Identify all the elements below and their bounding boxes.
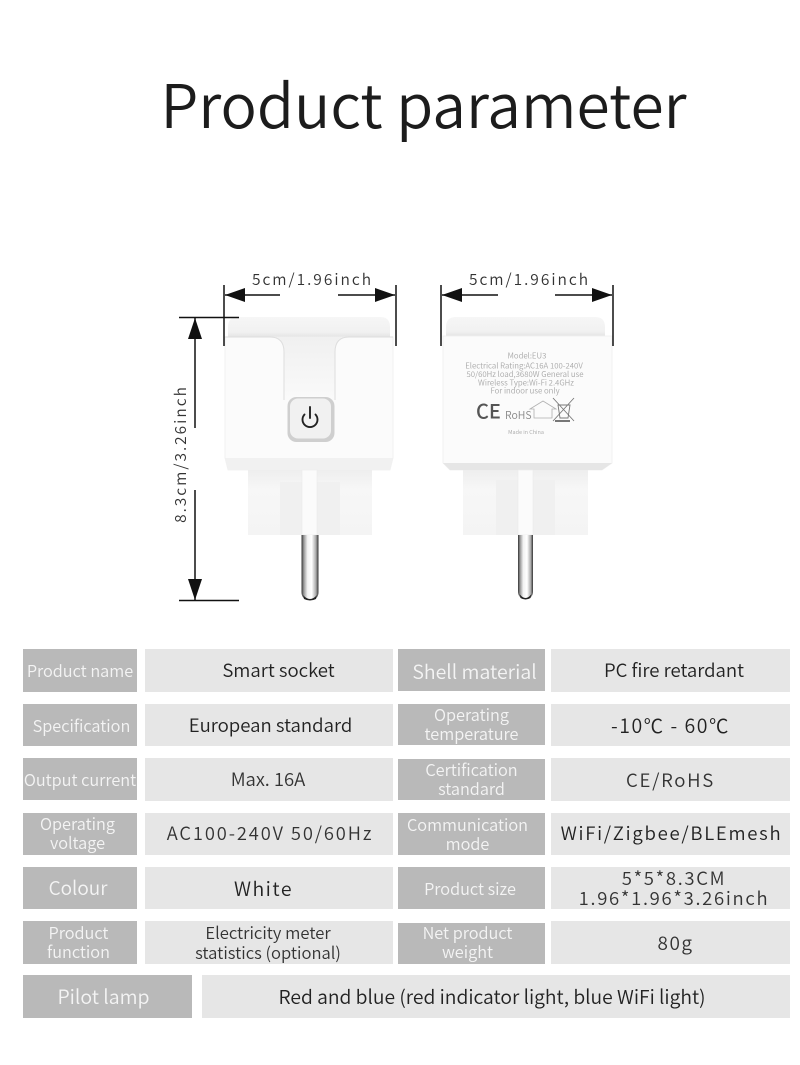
value: certification standard xyxy=(551,758,790,801)
label: certification standard: standard xyxy=(438,776,505,800)
value: shell material xyxy=(551,649,790,692)
value: product size: 1.96*1.96*3.26inch xyxy=(579,885,769,911)
label: colour xyxy=(23,867,137,909)
label: product name: Product name xyxy=(27,658,133,682)
value: product function: Electricity meter xyxy=(205,920,331,944)
rear label text: Model:EU3 xyxy=(508,350,546,362)
rear label text: Wireless Type:Wi-Fi 2.4GHz xyxy=(478,378,574,388)
label: net product weight: weight xyxy=(442,938,493,962)
label: certification standard xyxy=(398,759,545,800)
label: product function: function xyxy=(47,938,110,962)
rear plug xyxy=(443,317,612,600)
value: specification xyxy=(145,704,393,746)
certification marks: CE xyxy=(476,396,501,424)
width dimension: rear: 5cm/1.96inch xyxy=(469,268,590,290)
rear label text xyxy=(465,350,584,436)
label: pilot lamp xyxy=(23,975,192,1018)
value: product size xyxy=(551,867,790,909)
value: product name: Smart socket xyxy=(222,656,335,683)
label: operating voltage: voltage xyxy=(50,830,105,854)
value: shell material: PC fire retardant xyxy=(604,656,744,683)
product diagram xyxy=(169,268,614,602)
rear label text: Made in China xyxy=(508,428,544,436)
width dimension: front xyxy=(224,268,396,346)
width dimension: front: 5cm/1.96inch xyxy=(252,268,373,290)
label: communication mode: mode xyxy=(446,830,489,854)
label: pilot lamp: Pilot lamp xyxy=(57,981,150,1010)
value: colour xyxy=(145,867,393,909)
certification marks: RoHS xyxy=(505,408,532,423)
label: net product weight xyxy=(398,923,545,964)
label: net product weight: Net product xyxy=(423,920,512,944)
value: product function: statistics (optional) xyxy=(195,940,341,964)
label: operating voltage: Operating xyxy=(40,810,115,834)
label: shell material xyxy=(398,649,545,691)
label: operating temperature: Operating xyxy=(434,702,509,726)
label: product function xyxy=(23,921,137,964)
rear label text: 50/60Hz load,3680W General use xyxy=(466,369,584,380)
value: operating temperature xyxy=(551,704,790,746)
label: communication mode: Communication xyxy=(407,812,528,836)
label: operating voltage xyxy=(23,813,137,855)
value: product function xyxy=(145,921,393,964)
width dimension: rear xyxy=(441,268,613,346)
title: Product parameter xyxy=(160,59,686,146)
value: net product weight: 80g xyxy=(658,928,693,956)
label: specification xyxy=(23,704,137,746)
value: communication mode: WiFi/Zigbee/BLEmesh xyxy=(561,819,782,846)
front plug xyxy=(225,317,393,600)
label: output current: Output current xyxy=(24,766,136,790)
label: operating temperature xyxy=(398,704,545,745)
label: product size: Product size xyxy=(424,876,516,900)
value: output current xyxy=(145,758,393,801)
value: specification: European standard xyxy=(189,711,352,738)
height dimension: 8.3cm/3.26inch xyxy=(169,385,191,523)
value: operating voltage: AC100-240V 50/60Hz xyxy=(167,820,373,846)
label: colour: Colour xyxy=(49,874,107,900)
label: specification: Specification xyxy=(33,712,130,736)
value: communication mode xyxy=(551,813,790,855)
label: communication mode xyxy=(398,813,545,855)
label: product name xyxy=(23,649,137,692)
value: output current: Max. 16A xyxy=(231,766,305,792)
rear label text: For indoor use only xyxy=(490,386,560,396)
label: product function: Product xyxy=(49,920,108,944)
value: pilot lamp xyxy=(202,975,790,1018)
rear label text: Electrical Rating:AC16A 100-240V xyxy=(465,360,583,372)
label: certification standard: Certification xyxy=(425,756,518,780)
value: operating voltage xyxy=(145,813,393,855)
label: operating temperature: temperature xyxy=(424,720,518,744)
certification marks xyxy=(476,396,574,424)
label: product size xyxy=(398,867,545,909)
icon: power button xyxy=(288,397,334,442)
value: product name xyxy=(145,649,393,692)
value: product size: 5*5*8.3CM xyxy=(622,865,726,891)
value: pilot lamp: Red and blue (red indicator light, blue WiFi light) xyxy=(278,982,706,1010)
height dimension xyxy=(169,318,239,600)
value: operating temperature: -10℃ - 60℃ xyxy=(611,710,730,739)
label: output current xyxy=(23,758,137,800)
value: net product weight xyxy=(551,921,790,964)
label: shell material: Shell material xyxy=(412,656,537,684)
value: colour: White xyxy=(234,873,293,902)
specification table xyxy=(23,649,790,1018)
value: certification standard: CE/RoHS xyxy=(626,766,715,792)
